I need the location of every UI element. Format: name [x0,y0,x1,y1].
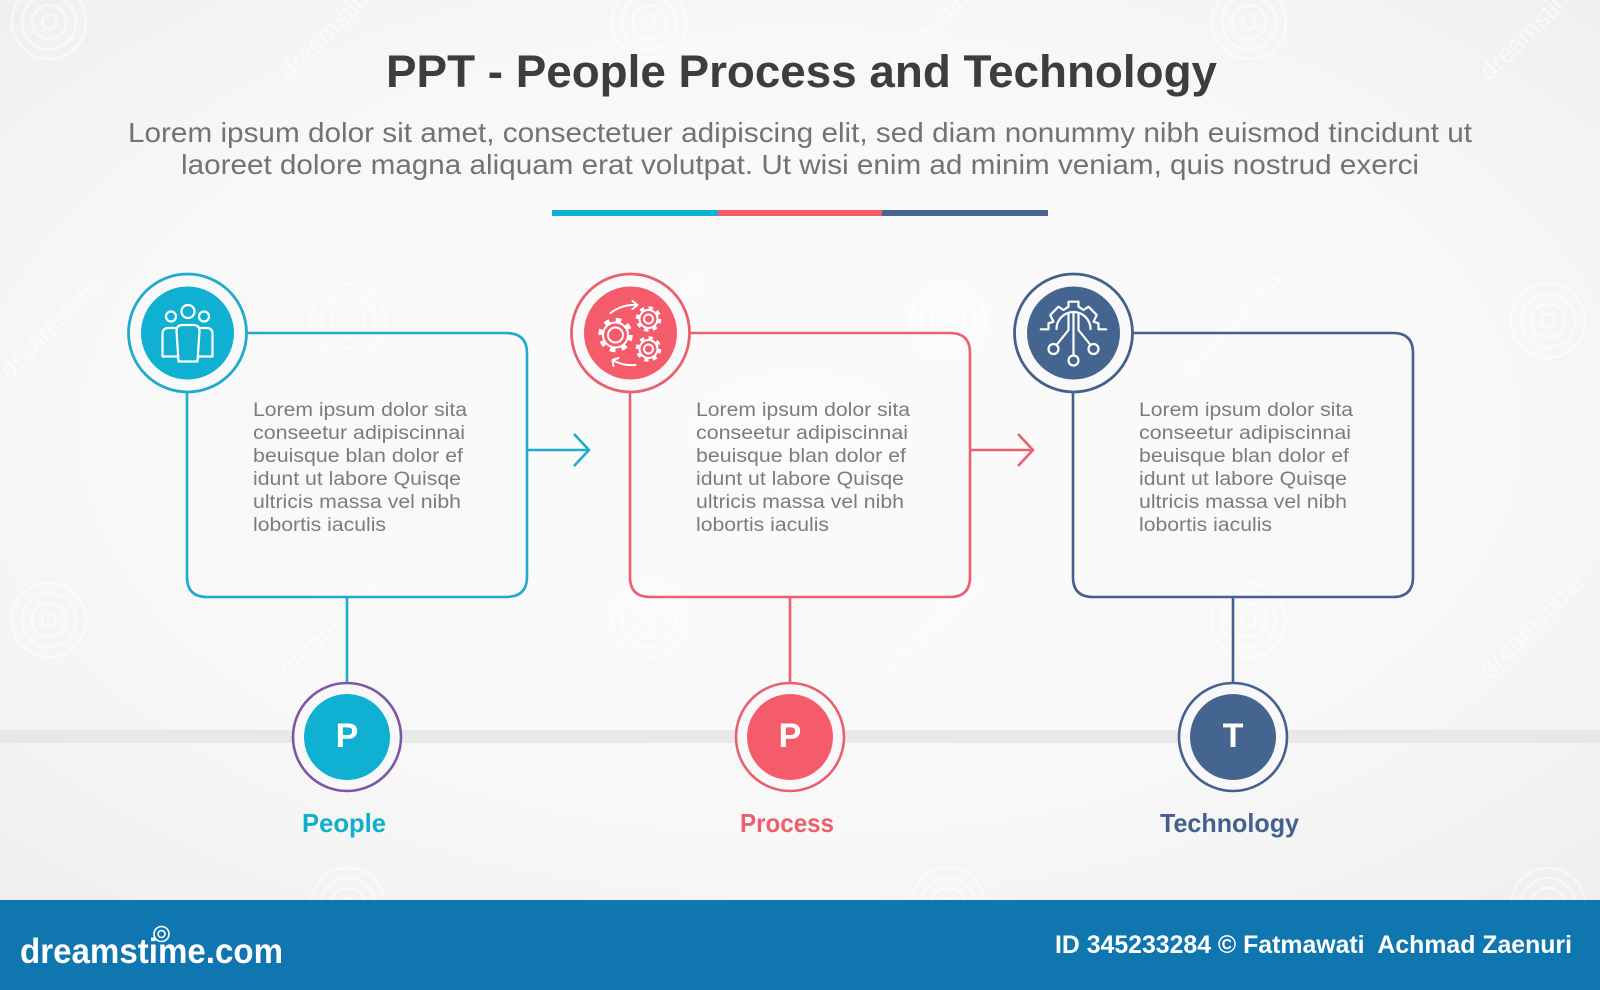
body text: idunt ut labore Quisqe [253,469,461,490]
label: People [302,808,386,838]
body text: idunt ut labore Quisqe [1139,469,1347,490]
body text: lobortis iaculis [253,515,386,536]
body text [696,400,910,536]
subtitle: Lorem ipsum dolor sit amet, consectetuer adipiscing elit, sed diam nonummy nibh euismod tincidunt ut [128,117,1472,148]
panel: people: P [336,717,358,755]
label: Technology [1160,808,1300,838]
body text: conseetur adipiscinnai [696,423,908,444]
body text: idunt ut labore Quisqe [696,469,904,490]
watermark pattern: dreamstime [873,567,990,684]
connector [789,597,791,685]
icon: circuit gear [1041,302,1106,366]
panel: people [128,274,589,838]
subtitle [128,117,1472,180]
panel: technology [1014,274,1413,838]
letter circle [1179,683,1287,791]
subtitle: laoreet dolore magna aliquam erat volutpat. Ut wisi enim ad minim veniam, quis nostrud exerci [181,149,1419,180]
letter circle [293,683,401,791]
watermark pattern: dreamstime [273,567,390,684]
logo spiral [154,926,169,942]
connector [346,597,348,685]
icon: gears [600,301,660,366]
arrow [527,434,589,466]
watermark pattern: dreamstime [593,267,710,384]
panel: process [572,274,1033,838]
body text: ultricis massa vel nibh [696,492,904,513]
body text: Lorem ipsum dolor sita [1139,400,1353,421]
body text [1139,400,1353,536]
body text: lobortis iaculis [696,515,829,536]
label: Process [740,808,834,838]
title: PPT - People Process and Technology [386,46,1217,97]
body text: beuisque blan dolor ef [1139,446,1350,467]
body text: beuisque blan dolor ef [696,446,907,467]
body text: lobortis iaculis [1139,515,1272,536]
icon: people [162,305,212,362]
panel: process: P [779,717,801,755]
top icon circle [128,274,246,392]
top icon circle [572,274,690,392]
timeline band [0,730,1600,743]
watermark pattern: dreamstime [1473,567,1590,684]
box outline [187,333,527,597]
image credit: ID 345233284 © Fatmawati Achmad Zaenuri [1055,931,1572,959]
body text: ultricis massa vel nibh [253,492,461,513]
body text: conseetur adipiscinnai [253,423,465,444]
top icon circle [1014,274,1132,392]
body text [253,400,467,536]
body text: Lorem ipsum dolor sita [696,400,910,421]
connector [1232,597,1234,685]
box outline [1073,333,1413,597]
footer bar [0,900,1600,990]
divider [552,210,1048,216]
arrow [970,434,1033,466]
letter circle [736,683,844,791]
body text: ultricis massa vel nibh [1139,492,1347,513]
body text: conseetur adipiscinnai [1139,423,1351,444]
body text: beuisque blan dolor ef [253,446,464,467]
box outline [630,333,970,597]
panel: technology: T [1223,717,1244,755]
watermark pattern: dreamstime [1173,267,1290,384]
logo wordmark: dreamstime.com [20,932,283,971]
body text: Lorem ipsum dolor sita [253,400,467,421]
